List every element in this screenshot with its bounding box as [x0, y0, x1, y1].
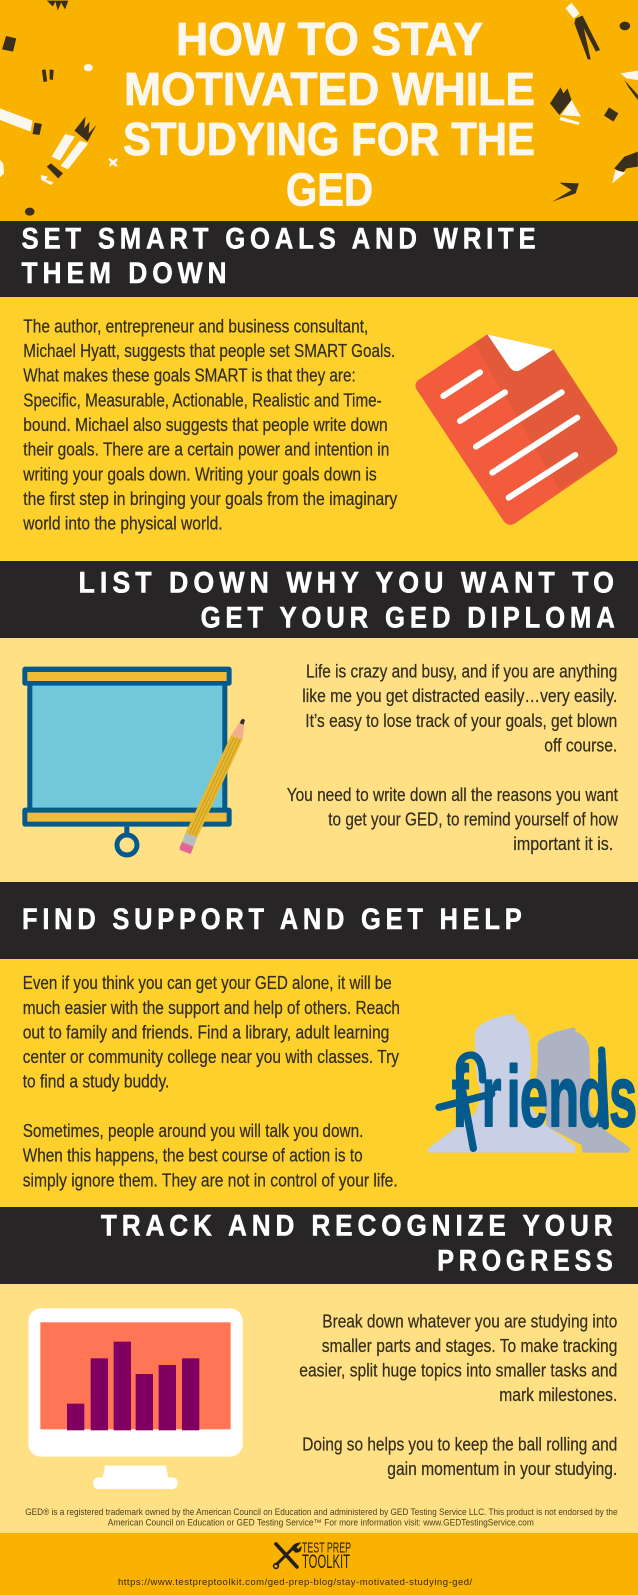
title: GED: [286, 164, 373, 216]
icon: presentation screen with pencil: [22, 667, 245, 855]
text block: smart goals: writing your goals down. Writing your goals down is: [22, 463, 377, 484]
icon: friends silhouettes and lettering: friends: [452, 1049, 637, 1146]
icon: monitor with bar chart: [28, 1308, 243, 1489]
section heading: find support: [0, 882, 638, 959]
text block: smart goals: the first step in bringing your goals from the imaginary: [23, 488, 398, 509]
text block: support: center or community college near you with classes. Try: [23, 1046, 399, 1067]
panel: smart goals: [0, 297, 638, 561]
disclaimer: American Council on Education or GED Testing Service™ For more information visit: www.GEDTestingService.com: [108, 1517, 534, 1527]
text block: support: Even if you think you can get your GED alone, it will be: [23, 972, 392, 993]
text block: smart goals: world into the physical world.: [22, 513, 223, 534]
section heading: set smart goals: THEM DOWN: [22, 257, 232, 290]
icon: friends silhouettes and lettering: [427, 1014, 637, 1153]
decorative art: stationery shapes, right: [550, 3, 638, 202]
panel: title header: [0, 0, 638, 221]
text block: smart goals: bound. Michael also suggests that people write down: [23, 414, 388, 435]
section heading: find support: FIND SUPPORT AND GET HELP: [22, 903, 526, 936]
disclaimer: [25, 1507, 618, 1527]
title: HOW TO STAY: [176, 13, 483, 65]
text block: support: Sometimes, people around you will talk you down.: [23, 1120, 363, 1141]
decorative art: stationery shapes, left: [0, 1, 118, 216]
logo: Test Prep Toolkit: TOOLKIT: [302, 1552, 350, 1573]
panel: footer: [0, 1533, 638, 1595]
disclaimer: GED® is a registered trademark owned by the American Council on Education and administered by GED Testing Service LLC. This product is not endorsed by the: [25, 1507, 618, 1517]
text block: smart goals: Michael Hyatt, suggests that people set SMART Goals.: [23, 340, 395, 361]
icon: document: [415, 334, 617, 525]
source url: https://www.testpreptoolkit.com/ged-prep-blog/stay-motivated-studying-ged/: [118, 1577, 473, 1588]
section heading: set smart goals: SET SMART GOALS AND WRITE: [22, 222, 540, 255]
logo: Test Prep Toolkit: [274, 1540, 351, 1573]
text block: smart goals: Specific, Measurable, Actionable, Realistic and Time-: [23, 389, 382, 410]
text block: smart goals: The author, entrepreneur and business consultant,: [23, 315, 368, 336]
section heading: set smart goals: [0, 221, 638, 297]
text block: reasons: off course.: [544, 734, 617, 755]
text block: support: [23, 972, 400, 1190]
title: [123, 13, 535, 216]
panel: support: [0, 959, 638, 1207]
text block: support: simply ignore them. They are not in control of your life.: [23, 1169, 398, 1190]
panel: reasons: [0, 638, 638, 882]
section heading: list down why: [0, 561, 638, 638]
title: MOTIVATED WHILE: [124, 63, 535, 115]
text block: progress: mark milestones.: [499, 1384, 617, 1405]
panel: progress: [0, 1284, 638, 1533]
text block: smart goals: their goals. There are a certain power and intention in: [23, 439, 389, 460]
text block: support: When this happens, the best course of action is to: [23, 1145, 363, 1166]
text block: support: much easier with the support and help of others. Reach: [23, 997, 400, 1018]
text block: smart goals: What makes these goals SMART is that they are:: [23, 365, 356, 386]
section heading: track progress: [0, 1207, 638, 1284]
text block: support: out to family and friends. Find a library, adult learning: [23, 1021, 389, 1042]
text block: progress: [299, 1310, 617, 1479]
title: STUDYING FOR THE: [123, 113, 535, 165]
text block: reasons: important it is.: [513, 833, 613, 854]
text block: support: to find a study buddy.: [23, 1071, 169, 1092]
logo: Test Prep Toolkit: TEST PREP: [302, 1540, 351, 1556]
text block: reasons: [287, 660, 619, 854]
text block: smart goals: [22, 315, 398, 534]
